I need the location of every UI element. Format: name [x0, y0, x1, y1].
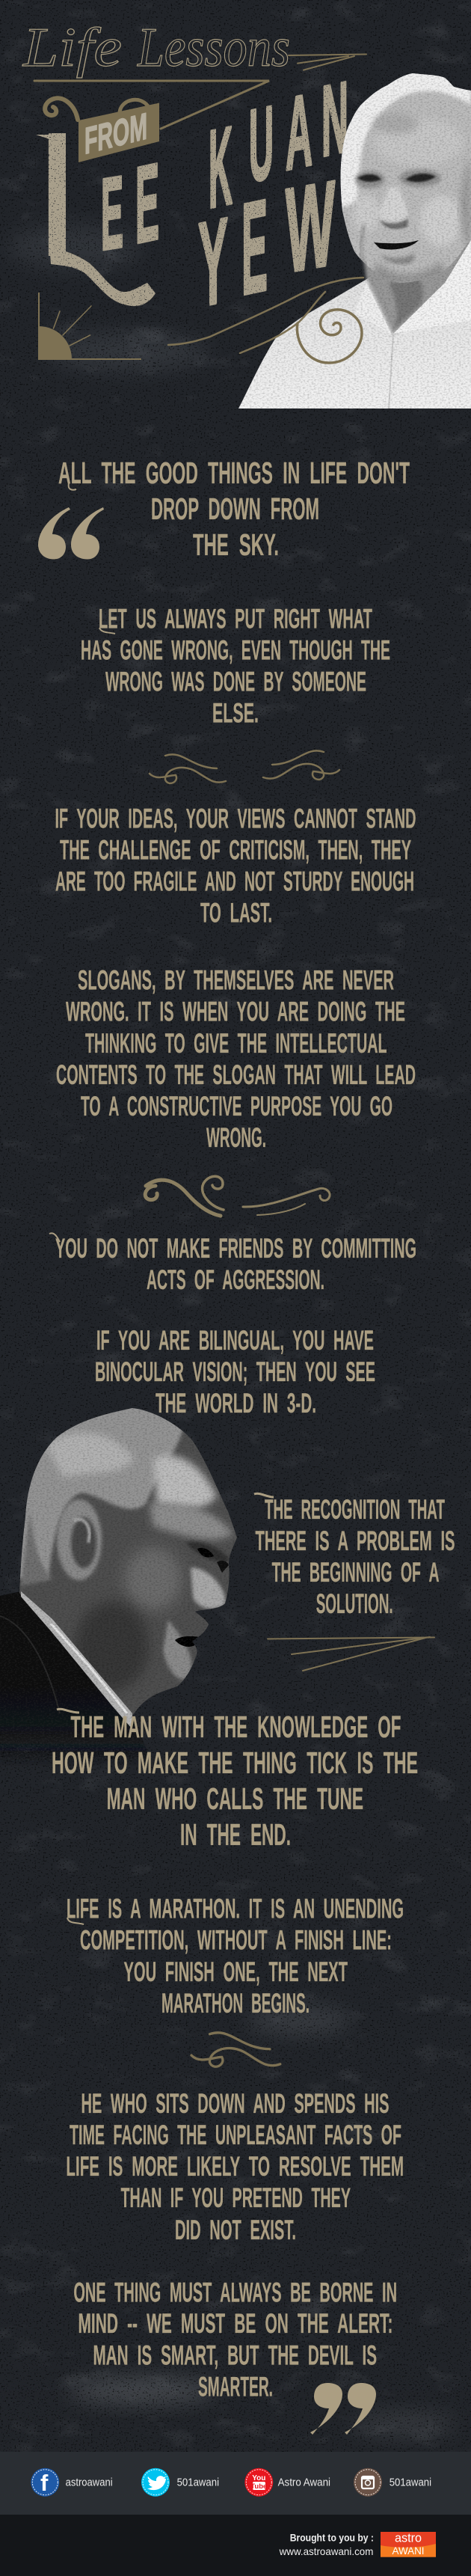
quote: life is a marathon: MARATHON BEGINS.	[161, 1988, 310, 2019]
icon: instagram	[354, 2468, 382, 2497]
quote: put right what has gone wrong	[81, 603, 390, 729]
quote: good things	[58, 456, 410, 562]
ornament: rule and scrolls above banner	[34, 81, 269, 129]
title: Lee Kuan Yew	[36, 81, 347, 307]
icon: youtube	[244, 2468, 273, 2497]
quote: he who sits down	[66, 2088, 404, 2245]
icon: rising sun ornament	[39, 293, 141, 359]
logo: astro awani: AWANI	[392, 2545, 425, 2557]
quote: ideas and views: TO LAST.	[200, 898, 272, 928]
icon: twitter	[141, 2468, 170, 2497]
ornament: swirl divider	[145, 1176, 330, 1216]
icon: facebook	[31, 2468, 59, 2497]
quote: the man with the knowledge: IN THE END.	[180, 1817, 291, 1852]
panel: credit footer	[0, 2515, 471, 2576]
quote: he who sits down: DID NOT EXIST.	[175, 2215, 296, 2245]
label: 501awani: 501awani	[390, 2477, 431, 2489]
label: Astro Awani: Astro Awani	[278, 2477, 330, 2489]
arrow: converging lines	[268, 1637, 434, 1671]
quote: recognition: SOLUTION.	[316, 1588, 393, 1619]
logo: astro awani: astro	[395, 2530, 422, 2545]
quote: friends	[49, 1233, 416, 1295]
ornament: small flourish	[191, 2033, 280, 2066]
title: Lee Kuan Yew: Y	[198, 193, 228, 333]
quote: devil is smarter	[73, 2277, 397, 2402]
quote: recognition	[254, 1493, 455, 1619]
title: Lee Kuan Yew: U	[249, 85, 274, 204]
photo: Lee Kuan Yew in profile	[0, 1403, 247, 1767]
icon: youtube: You	[252, 2474, 265, 2482]
banner: FROM: FROM	[84, 105, 147, 162]
text: brought to you by: Brought to you by :	[290, 2532, 374, 2544]
title: Lee Kuan Yew: E	[101, 155, 123, 272]
quote: devil is smarter: SMARTER.	[198, 2372, 273, 2402]
label: 501awani: 501awani	[177, 2477, 219, 2489]
banner: FROM	[78, 103, 159, 162]
quote: bilingual	[95, 1325, 375, 1419]
title: Lee Kuan Yew: A	[286, 73, 313, 192]
label: astroawani: astroawani	[66, 2477, 113, 2489]
ornament: twin flourish	[150, 750, 339, 783]
quote mark: opening	[38, 507, 104, 560]
quote: put right what has gone wrong: ELSE.	[212, 698, 259, 729]
title: Lee Kuan Yew: E	[241, 172, 268, 323]
text: website: www.astroawani.com	[279, 2545, 373, 2557]
ornament: header spiral and sweeps	[168, 278, 363, 363]
icon: youtube: Tube	[250, 2482, 267, 2491]
icon: facebook: f	[40, 2470, 49, 2496]
panel: social media bar	[0, 2452, 471, 2515]
title: Lee Kuan Yew: W	[286, 156, 335, 299]
title: Life Lessons	[22, 17, 290, 79]
logo: astro awani	[381, 2530, 436, 2557]
quote: good things: DROP DOWN FROM	[151, 492, 319, 526]
quote: bilingual: THE WORLD IN 3-D.	[156, 1388, 316, 1419]
title: Life Lessons: Lessons	[137, 17, 290, 79]
photo: Lee Kuan Yew smiling	[238, 67, 471, 409]
arrow: title flourish	[289, 54, 366, 70]
quote: the man with the knowledge	[52, 1709, 418, 1852]
title: Lee Kuan Yew: L	[42, 94, 111, 303]
title: Lee Kuan Yew: E	[135, 141, 159, 267]
quote mark: closing	[310, 2383, 376, 2435]
quote: life is a marathon	[67, 1894, 404, 2019]
quote: ideas and views	[55, 804, 416, 928]
quote: good things: THE SKY.	[193, 527, 279, 562]
quote: slogans	[56, 965, 416, 1153]
title: Life Lessons: Life	[22, 17, 122, 79]
quote: slogans: WRONG.	[206, 1122, 266, 1153]
title: Lee Kuan Yew: K	[209, 103, 233, 232]
text: N	[321, 60, 348, 178]
